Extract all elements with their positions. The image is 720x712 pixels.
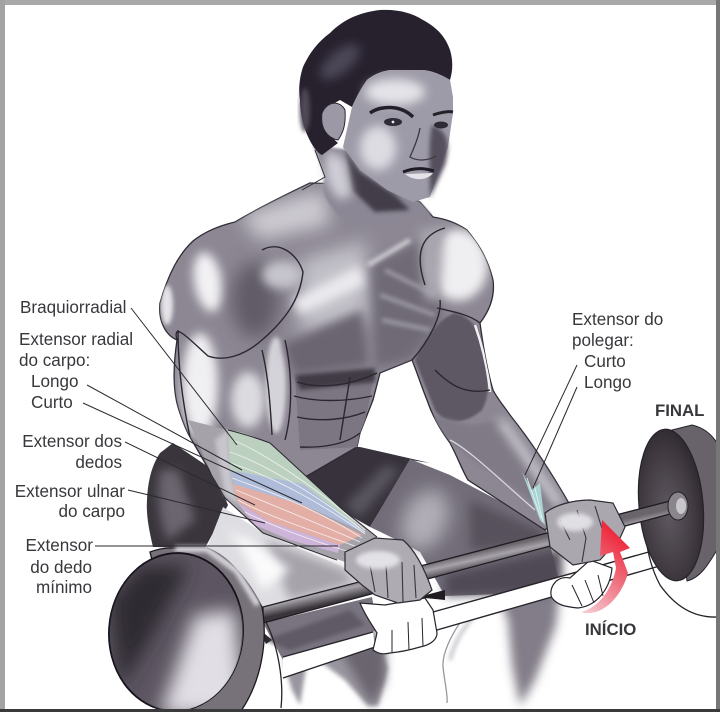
leader lines (83, 308, 577, 546)
start-position plate outlines (265, 533, 717, 708)
muscle: extensor dos dedos red (233, 484, 362, 545)
label: Extensor do polegar: polegar: (572, 331, 634, 350)
right pectoral (368, 235, 442, 368)
label: Extensor dos dedos: Extensor dos (22, 432, 122, 451)
shorts highlight (158, 470, 195, 540)
shorts: centre (285, 445, 430, 527)
label: Extensor dos dedos (22, 432, 122, 472)
red movement arrow (581, 520, 630, 613)
label: Braquiorradial: Braquiorradial (20, 298, 126, 317)
label: Extensor do dedo minimo (26, 536, 93, 597)
hair (299, 10, 452, 155)
label: Extensor radial do carpo (19, 330, 133, 412)
label: Extensor dos dedos: dedos (75, 453, 122, 472)
thumb extensors muscle (522, 472, 545, 525)
left weight plate (104, 548, 264, 712)
right weight plate (632, 425, 717, 583)
muscle: braquiorradial green (228, 430, 365, 533)
label: Extensor radial do carpo: Extensor radial (19, 330, 133, 349)
left gripping hand (345, 538, 432, 603)
label: Extensor do dedo minimo: mínimo (36, 578, 92, 597)
abdominal tones (295, 368, 375, 450)
label: Extensor radial do carpo: Longo (31, 372, 79, 391)
label: INICIO: INÍCIO (585, 620, 636, 639)
ear (322, 103, 345, 140)
torso and arms base (160, 183, 570, 530)
label: Extensor do dedo minimo: Extensor (26, 536, 93, 555)
right gripping hand (545, 500, 625, 565)
labels: left forearm muscles (15, 298, 133, 597)
torso shading (161, 190, 560, 510)
region between barbell and start position (258, 597, 378, 660)
start-position left hand outline (360, 590, 445, 654)
barbell shaft (263, 501, 670, 623)
face (322, 70, 453, 202)
collar on right end (668, 492, 688, 520)
muscle: extensor ulnar purple (237, 502, 340, 553)
eyebrows and eyes (370, 107, 453, 128)
label: Extensor ulnar do carpo: Extensor ulnar (15, 482, 125, 501)
start-position right hand outline (551, 560, 612, 608)
forearm outline (224, 430, 377, 560)
label: Extensor radial do carpo: do carpo: (19, 351, 90, 370)
muscle: extensors blue (230, 470, 365, 533)
label: Extensor ulnar do carpo: do carpo (58, 502, 125, 521)
label: FINAL: FINAL (655, 401, 704, 420)
start-position bar band, right (430, 548, 663, 632)
lower legs (283, 585, 560, 706)
right arm (415, 313, 560, 510)
left arm tones (161, 190, 330, 437)
start-position bar band, left (283, 632, 375, 678)
label: Extensor do polegar: Extensor do (572, 310, 663, 329)
forearm fibres (230, 440, 365, 552)
muscle definition lines (176, 228, 490, 447)
label: Extensor ulnar do carpo (15, 482, 125, 521)
nose and mouth (403, 128, 436, 179)
neck (302, 145, 432, 225)
label: Extensor do polegar: Curto (584, 352, 626, 371)
label: Extensor do polegar (572, 310, 663, 392)
left pectoral (283, 240, 370, 375)
shorts: left side (147, 443, 228, 548)
right deltoid (418, 225, 488, 301)
label: Extensor do dedo minimo: do dedo (30, 558, 92, 577)
label: Extensor radial do carpo: Curto (31, 393, 73, 412)
left forearm (188, 420, 377, 562)
thigh: right part (370, 459, 562, 596)
thigh: bright left part (207, 507, 362, 610)
plate face highlight (110, 565, 245, 712)
label: Extensor do polegar: Longo (584, 373, 632, 392)
